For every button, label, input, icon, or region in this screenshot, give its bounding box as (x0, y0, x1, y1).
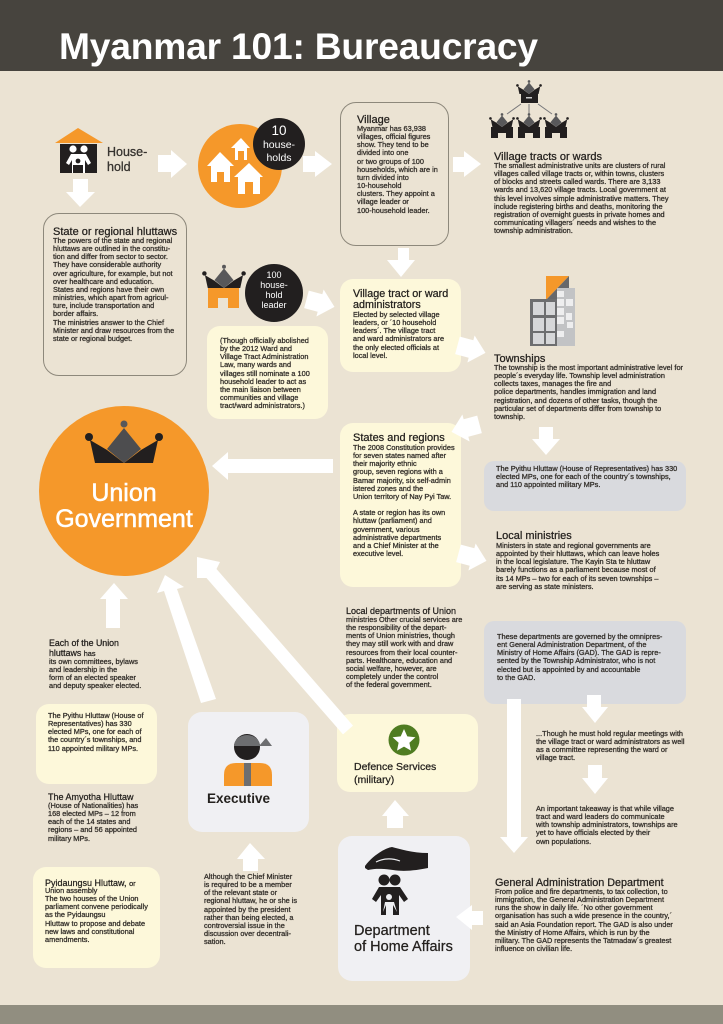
text: hundred household leader note: communities and village (220, 393, 298, 402)
text: hundred household leader note: Village Tract Administration (220, 352, 308, 361)
text: regular meetings: the village tract or ward administrators as well (536, 737, 685, 746)
text: general administration department: immigration, the General Administration Department (495, 895, 664, 904)
label: defence services: Defence Services (354, 761, 436, 773)
text: GAD governance: Ministry of Home Affairs (GAD). The GAD is repre- (497, 648, 661, 657)
text: village tracts or wards: villages called village tracts or, within towns, clusters (494, 169, 664, 178)
text: state or regional hluttaws: ture, include transportation and (53, 301, 154, 310)
text: chief minister: of the relevant state or (204, 888, 277, 897)
text: general administration department: organisation has such a wide presence in the country,´ (495, 911, 672, 920)
text: state or regional hluttaws: over agriculture, for example, but not (53, 269, 173, 278)
icon: 100 household leader crown (202, 265, 246, 308)
text: state or regional hluttaws: The ministries answer to the Chief (53, 318, 164, 327)
text: states and regions: government, various (353, 525, 420, 534)
text: state or regional hluttaws: States and regions have their own (53, 285, 164, 294)
text: state or regional hluttaws: hluttaws are outlined in the constitu- (53, 244, 170, 253)
arrow: ten households to village (303, 151, 332, 177)
text: local ministries: its 14 MPs – two for each of its seven townships – (496, 574, 658, 583)
arrow: meetings down (582, 765, 608, 794)
text: village tract or ward administrators: Village tract or ward (353, 288, 448, 300)
text: local departments of union ministries: parts. Healthcare, education and (346, 656, 452, 665)
text: state or regional hluttaws (52, 226, 177, 343)
ten households label: 10 (271, 123, 287, 138)
text: local departments of union ministries: completely under the control (346, 672, 438, 681)
100 household leader label: leader (261, 300, 287, 310)
text: village tracts or wards: registration of overnight guests in private homes and (494, 210, 665, 219)
text: state or regional hluttaws: over healthcare and education. (53, 277, 154, 286)
panel: Pyithu Hluttaw grey (484, 461, 686, 511)
icon: ten households badge (253, 118, 305, 170)
text: general administration department: the Ministry of Home Affairs, which is run by the (495, 928, 650, 937)
union government label: Government (55, 505, 193, 533)
text: pyithu hluttaw yellow: the country´s townships, and (48, 735, 141, 744)
text: states and regions: A state or region has its own (353, 508, 445, 517)
arrow: defence to union government (197, 557, 353, 734)
text: pyithu hluttaw yellow: The Pyithu Hluttaw (House of (48, 711, 144, 720)
text: chief minister (204, 872, 297, 946)
label: defence services (354, 761, 436, 786)
text: pyidaungsu hluttaw: Pyidaungsu Hluttaw, or (45, 878, 136, 888)
text: important takeaway (536, 804, 678, 846)
panel: departments grey (484, 621, 686, 704)
text: village: or two groups of 100 (357, 157, 424, 166)
text: chief minister: regional hluttaw, he or she is (204, 896, 297, 905)
text: pyidaungsu hluttaw: The two houses of the Union (45, 894, 138, 903)
text: hundred household leader note: tract/ward administrators.) (220, 401, 305, 410)
text: pyidaungsu hluttaw: as the Pyidaungsu (45, 910, 105, 919)
text: regular meetings: ...Though he must hold regular meetings with (536, 729, 683, 738)
text: union hluttaws: and leadership in the (49, 665, 117, 674)
text: village: 10-household (357, 181, 402, 190)
text: GAD governance: sented by the Township Administrator, who is not (497, 656, 655, 665)
text: village tracts or wards: wards and 13,620 village tracts. Local government at (494, 185, 666, 194)
text: important takeaway: tract and ward leaders do communicate (536, 812, 665, 821)
text: village tract or ward administrators: and ward administrators are (353, 334, 444, 343)
text: village tract or ward administrators: local level. (353, 351, 387, 360)
text: pyithu hluttaw yellow (48, 711, 144, 753)
text: hundred household leader note: Law, many wards and (220, 360, 291, 369)
text: townships: The township is the most important administrative level for (494, 363, 683, 372)
text: general administration department: military. The GAD represents the Tatmadaw´s greatest (495, 936, 671, 945)
text: chief minister: sation. (204, 937, 226, 946)
text: states and regions: hluttaw (parliament) and (353, 516, 432, 525)
text: amyotha hluttaw (48, 792, 138, 843)
text: local departments of union ministries: the responsibility of the depart- (346, 623, 446, 632)
arrow: departments to GAD (500, 699, 528, 853)
text: amyotha hluttaw: each of the 14 states and (48, 817, 130, 826)
text: pyithu hluttaw yellow: 110 appointed military MPs. (48, 744, 138, 753)
text: states and regions: States and regions (353, 432, 445, 444)
icon: ten households circle (198, 124, 282, 208)
text: village: Myanmar has 63,938 (357, 124, 426, 133)
text: local departments of union ministries: ments of Union ministries, though (346, 631, 455, 640)
arrow: village to village tracts (453, 151, 481, 177)
text: general administration department: From police and fire departments, to tax collection, to (495, 887, 668, 896)
text: local departments of union ministries: resources from their local counter- (346, 648, 457, 657)
text: chief minister: is required to be a member (204, 880, 292, 889)
text: state or regional hluttaws: tion and differ from sector to sector. (53, 252, 168, 261)
text: hundred household leader note (220, 336, 310, 410)
text: village: show. They tend to be (357, 140, 429, 149)
text: chief minister: controversial issue in the (204, 921, 285, 930)
label: defence services: (military) (354, 774, 394, 786)
ten households label: holds (266, 152, 292, 164)
text: village: clusters. They appoint a (357, 189, 435, 198)
text: union hluttaws: Each of the Union (49, 638, 119, 648)
text: village: 100-household leader. (357, 206, 430, 215)
text: state or regional hluttaws: Minister and draw resources from the (53, 326, 174, 335)
text: union hluttaws: form of an elected speaker (49, 673, 136, 682)
text: local departments of union ministries: social welfare, however, are (346, 664, 437, 673)
text: important takeaway: with township administrators, townships are (536, 820, 678, 829)
arrow: chief minister to executive (237, 843, 265, 871)
header band (0, 0, 723, 71)
text: village tract or ward administrators: leaders, or ´10 household (353, 318, 436, 327)
text: pyidaungsu hluttaw: Hluttaw to propose and debate (45, 919, 145, 928)
text: important takeaway: yet to have officials elected by their (536, 828, 650, 837)
text: pyidaungsu hluttaw: Union assembly (45, 886, 97, 895)
text: village tract or ward administrators: administrators (353, 299, 421, 311)
text: union hluttaws: its own committees, bylaws (49, 657, 138, 666)
text: village tract or ward administrators: the only elected officials at (353, 343, 439, 352)
household label: House- (107, 145, 147, 159)
text: hundred household leader note: household leader to act as (220, 377, 306, 386)
100 household leader label: hold (265, 290, 282, 300)
text: union hluttaws: hluttaws has (49, 648, 96, 658)
text: local ministries: barely functions as a parliament because most of (496, 565, 656, 574)
text: states and regions: executive level. (353, 549, 403, 558)
text: GAD governance: elected but is appointed by and accountable (497, 665, 640, 674)
text: local departments of union ministries (346, 606, 462, 689)
arrow: household to ten households (158, 150, 187, 178)
text: state or regional hluttaws: The powers of the state and regional (53, 236, 172, 245)
text: hundred household leader note: villages still nominate a 100 (220, 369, 310, 378)
text: local departments of union ministries: Local departments of Union (346, 606, 456, 616)
text: village tracts or wards: of blocks and streets called wards. There are 3,133 (494, 177, 660, 186)
ten households label: house- (263, 139, 295, 151)
arrow: household to hluttaws (66, 179, 95, 207)
text: general administration department: runs the show in daily life. ´No other government (495, 903, 653, 912)
text: pyithu hluttaw yellow: Representatives) has 330 (48, 719, 132, 728)
text: townships (494, 353, 683, 421)
text: village tract or ward administrators (352, 288, 448, 360)
text: chief minister: rather than being elected, a (204, 913, 293, 922)
text: townships: collects taxes, manages the fire and (494, 379, 611, 388)
text: states and regions: administrative departments (353, 533, 441, 542)
text: village tracts or wards: township administration. (494, 226, 573, 235)
text: local departments of union ministries: they may still work with and draw (346, 639, 453, 648)
100 household leader label (260, 270, 288, 310)
text: village tracts or wards: this level involves simple administrative matters. They (494, 194, 669, 203)
text: village (356, 114, 438, 215)
arrow: states to local ministries (455, 540, 490, 574)
panel: village tract or ward administrators (340, 279, 461, 372)
arrow: executive to union government (157, 575, 216, 703)
text: general administration department: said an Asia Foundation report. The GAD is also under (495, 920, 673, 929)
text: amyotha hluttaw: The Amyotha Hluttaw (48, 792, 134, 802)
text: village: Village (357, 114, 390, 126)
text: townships: Townships (494, 353, 545, 365)
text: states and regions: their majority ethnic (353, 459, 417, 468)
text: local departments of union ministries: of the federal government. (346, 680, 432, 689)
text: village tracts or wards: include registering births and deaths, monitoring the (494, 202, 663, 211)
text: village tract or ward administrators: leaders´. The village tract (353, 326, 435, 335)
text: pyidaungsu hluttaw: new laws and constitutional (45, 927, 134, 936)
text: general administration department: influence on civilian life. (495, 944, 572, 953)
icon: defence star (388, 724, 420, 756)
arrow: administrators to townships (454, 332, 489, 366)
100 household leader label: house- (260, 280, 288, 290)
text: states and regions: istered zones and the (353, 484, 423, 493)
title: Myanmar 101: Bureaucracy (59, 25, 538, 67)
text: village tracts or wards (494, 151, 669, 235)
ten households label (263, 123, 295, 164)
arrow: departments down (582, 695, 608, 723)
arrow: states to union government (212, 452, 333, 480)
icon: household (55, 128, 103, 173)
text: hundred household leader note: the main liaison between (220, 385, 301, 394)
panel: Pyithu Hluttaw yellow (36, 704, 157, 784)
arrow: hluttaws to union government (100, 583, 128, 628)
text: pyidaungsu hluttaw (45, 878, 148, 944)
text: general administration department: General Administration Department (495, 877, 664, 889)
text: pyithu hluttaw yellow: elected MPs, one for each of (48, 727, 141, 736)
text: village: village leader or (357, 197, 409, 206)
text: pyithu hluttaw grey: elected MPs, one for each of the country´s townships, (496, 472, 671, 481)
arrow: townships to pyithu (532, 427, 560, 455)
text: state or regional hluttaws: State or regional hluttaws (53, 226, 177, 238)
icon: village tract hierarchy (489, 80, 569, 138)
text: states and regions: The 2008 Constitution provides (353, 443, 455, 452)
text: state or regional hluttaws: state or regional budget. (53, 334, 132, 343)
text: townships: registration, and dozens of other tasks, though the (494, 396, 657, 405)
text: pyidaungsu hluttaw: amendments. (45, 935, 90, 944)
text: amyotha hluttaw: regions – and 56 appointed (48, 825, 137, 834)
panel: states and regions (340, 423, 461, 587)
text: important takeaway: An important takeaway is that while village (536, 804, 674, 813)
100 household leader label: 100 (266, 270, 282, 280)
text: amyotha hluttaw: (House of Nationalities) has (48, 801, 138, 810)
text: GAD governance: These departments are governed by the omnipres- (497, 632, 662, 641)
panel: Pyidaungsu Hluttaw (33, 867, 160, 968)
label: executive: Executive (207, 791, 270, 806)
text: states and regions: and a Chief Minister at the (353, 541, 439, 550)
text: state or regional hluttaws: They have considerable authority (53, 260, 161, 269)
text: state or regional hluttaws: ministries, which apart from agricul- (53, 293, 168, 302)
text: chief minister: Although the Chief Minister (204, 872, 292, 881)
panel: village (340, 102, 449, 246)
text: states and regions: Union territory of Nay Pyi Taw. (353, 492, 451, 501)
label: department of home affairs: Department (354, 923, 430, 939)
arrow: GAD to home affairs (456, 905, 483, 930)
text: states and regions: group, seven regions with a (353, 467, 443, 476)
household label (107, 145, 147, 174)
arrow: townships to states (448, 411, 483, 445)
text: states and regions: Bamar majority, six self-admin (353, 476, 451, 485)
text: GAD governance: ent General Administration Department, of the (497, 640, 646, 649)
text: general administration department (494, 877, 673, 953)
text: townships: particular set of departments differ from township to (494, 404, 661, 413)
icon: executive figure (224, 734, 272, 786)
text: local departments of union ministries: ministries Other crucial services are (346, 615, 462, 624)
text: local ministries: in the local legislature. The Kayin Sta te hluttaw (496, 557, 650, 566)
text: pyithu hluttaw grey (496, 464, 678, 489)
footer band (0, 1005, 723, 1024)
panel: executive (188, 712, 309, 832)
text: important takeaway: own populations. (536, 837, 591, 846)
text: local ministries (496, 530, 660, 591)
union government label: Union (91, 479, 157, 507)
text: hundred household leader note: by the 2012 Ward and (220, 344, 292, 353)
icon: 100 household badge (245, 264, 303, 322)
text: pyithu hluttaw grey: and 110 appointed military MPs. (496, 480, 600, 489)
text: chief minister: discussion over decentrali- (204, 929, 291, 938)
arrow: village to administrators (387, 248, 415, 277)
text: regular meetings (536, 729, 685, 762)
text: local ministries: Ministers in state and regional governments are (496, 541, 651, 550)
text: regular meetings: as a committee representing the ward or (536, 745, 667, 754)
text: village tract or ward administrators: Elected by selected village (353, 310, 440, 319)
text: townships: township. (494, 412, 525, 421)
text: chief minister: appointed by the president (204, 905, 291, 914)
arrow: home affairs to defence (382, 800, 409, 828)
label: department of home affairs: of Home Affairs (354, 939, 453, 955)
text: village tracts or wards: Village tracts or wards (494, 151, 602, 163)
text: hundred household leader note: (Though officially abolished (220, 336, 309, 345)
text: pyithu hluttaw grey: The Pyithu Hluttaw (House of Representatives) has 330 (496, 464, 677, 473)
text: pyidaungsu hluttaw: parliament convene periodically (45, 902, 148, 911)
text: local ministries: are serving as state ministers. (496, 582, 594, 591)
panel: defence services (337, 714, 478, 792)
text: village tracts or wards: communicating villagers´ needs and wishes to the (494, 218, 656, 227)
union government label (55, 479, 193, 533)
text: townships: people´s everyday life. Township level administration (494, 371, 665, 380)
arrow: leader to administrators (303, 286, 338, 320)
text: village: turn divided into (357, 173, 409, 182)
text: amyotha hluttaw: military MPs. (48, 834, 90, 843)
text: village tracts or wards: The smallest administrative units are clusters of rural (494, 161, 665, 170)
label: department of home affairs (354, 923, 453, 955)
icon: township building (530, 276, 575, 346)
household label: hold (107, 160, 131, 174)
text: local ministries: appointed by their hluttaws, which can leave holes (496, 549, 659, 558)
text: village: villages, official figures (357, 132, 430, 141)
text: GAD governance: to the GAD. (497, 673, 535, 682)
text: local ministries: Local ministries (496, 530, 572, 542)
panel: department of home affairs (338, 836, 470, 981)
text: regular meetings: village tract. (536, 753, 575, 762)
icon: union government circle (39, 406, 209, 576)
text: village: divided into one (357, 148, 408, 157)
text: village: households, which are in (357, 165, 438, 174)
text: states and regions (352, 432, 455, 558)
text: GAD governance (496, 632, 662, 682)
text: townships: police departments, handles immigration and land (494, 387, 656, 396)
text: union hluttaws: and deputy speaker elected. (49, 681, 141, 690)
text: amyotha hluttaw: 168 elected MPs – 12 from (48, 809, 136, 818)
text: state or regional hluttaws: border affairs. (53, 309, 98, 318)
text: union hluttaws (48, 638, 141, 690)
icon: protective hand over family (365, 847, 428, 915)
text: states and regions: for seven states named after (353, 451, 446, 460)
panel: 100 household leader note (207, 326, 328, 419)
panel: state or regional hluttaws (43, 213, 187, 376)
